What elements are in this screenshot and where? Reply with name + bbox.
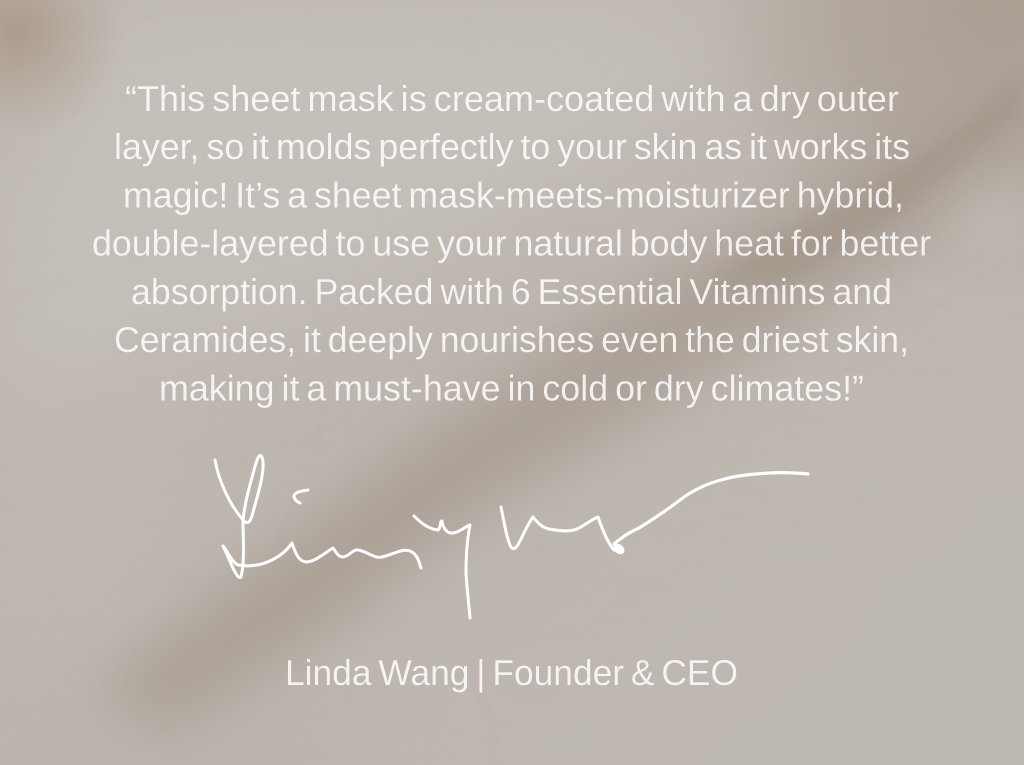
- quote text: [92, 78, 931, 408]
- quote text: absorption. Packed with 6 Essential Vitamins and: [131, 271, 892, 312]
- signature ink blob: [612, 542, 626, 556]
- quote text: Ceramides, it deeply nourishes even the driest skin,: [114, 319, 909, 360]
- signature: [215, 455, 808, 618]
- quote text: layer, so it molds perfectly to your skin as it works its: [114, 126, 910, 167]
- quote text: making it a must-have in cold or dry climates!”: [159, 368, 864, 408]
- quote text: magic! It’s a sheet mask-meets-moisturizer hybrid,: [123, 174, 904, 216]
- attribution: Linda Wang | Founder & CEO: [285, 652, 738, 693]
- quote text: “This sheet mask is cream-coated with a dry outer: [125, 78, 899, 119]
- quote text: double-layered to use your natural body heat for better: [92, 222, 931, 264]
